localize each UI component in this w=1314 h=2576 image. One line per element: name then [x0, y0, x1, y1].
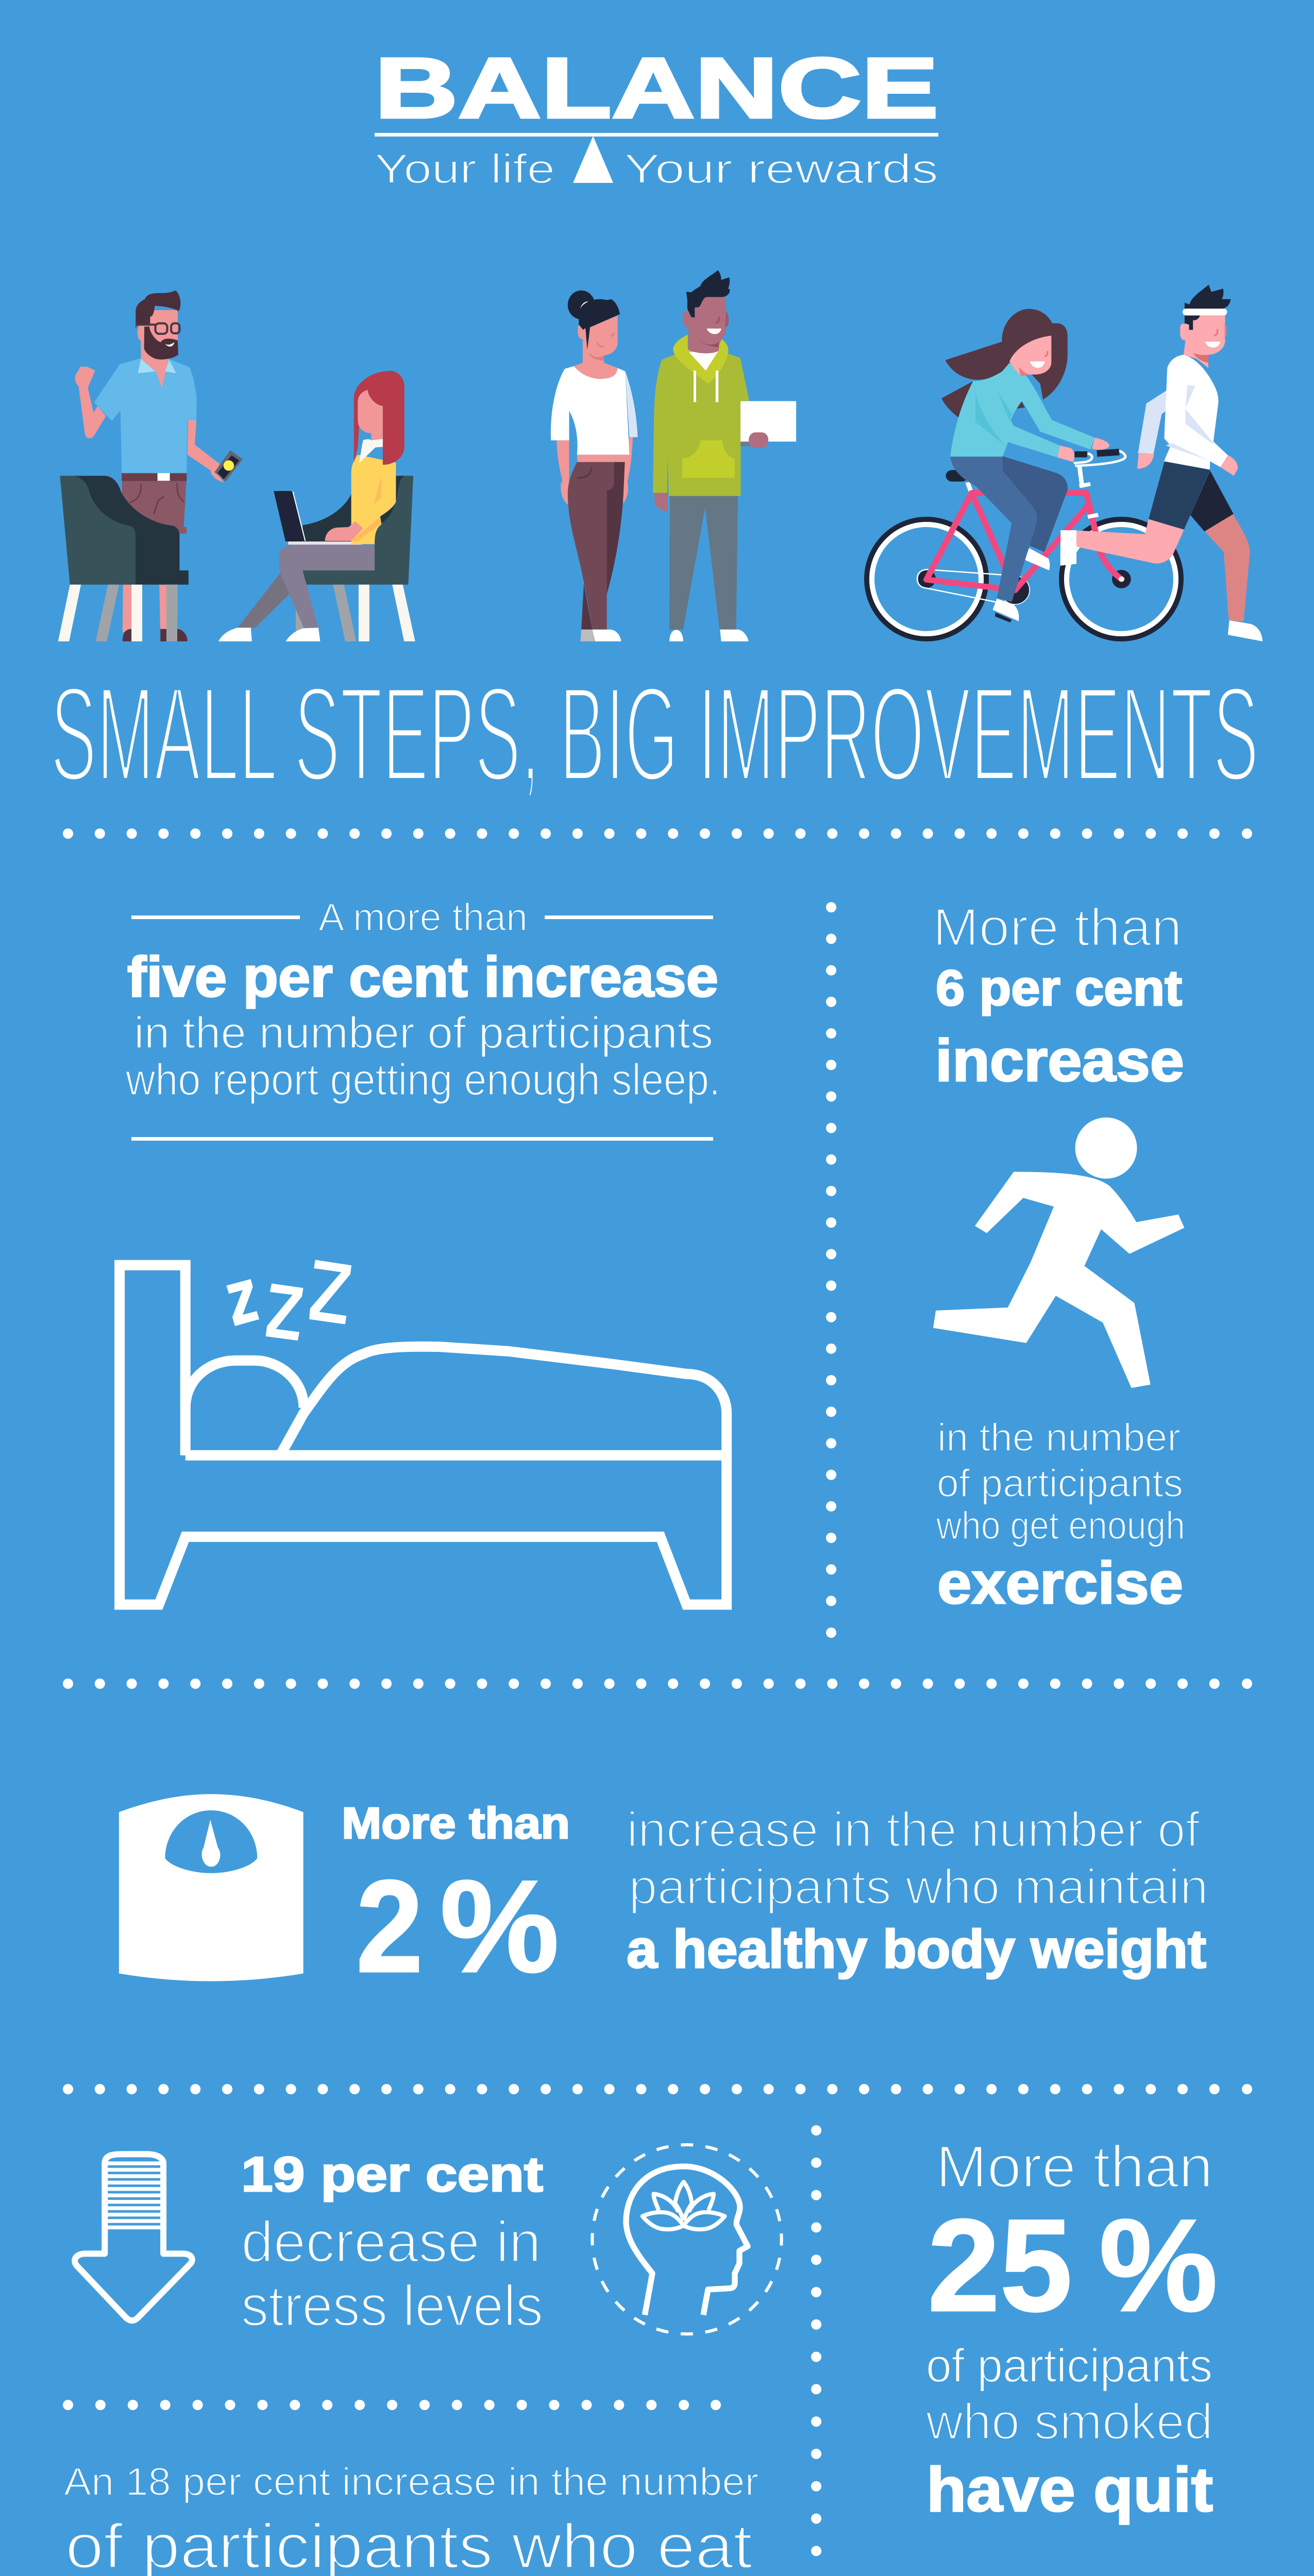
- logo: Balance Your life Your rewards: BALANCE: [375, 41, 938, 136]
- text block: sleep statistic: [125, 895, 720, 1141]
- title: small steps, big improvements: SMALL STEPS, BIG IMPROVEMENTS: [50, 658, 1259, 809]
- text block: healthy body weight: participants who maintain: [629, 1859, 1208, 1914]
- text block: more than 6 per cent increase: increase: [935, 1028, 1184, 1094]
- text block: more than 6 per cent increase: 6 per cent: [936, 960, 1182, 1016]
- icon: head with lotus in dashed circle: [592, 2145, 782, 2334]
- text block: 19 per cent decrease in stress levels: [241, 2147, 543, 2338]
- text block: exercise statistic: in the number: [937, 1416, 1181, 1460]
- text block: exercise statistic: exercise: [937, 1550, 1183, 1616]
- illustration: man standing and woman with laptop in chairs: [58, 291, 415, 641]
- text block: 25 per cent of smokers have quit: of participants: [926, 2340, 1212, 2392]
- illustration: bicycle wheels: [867, 519, 1181, 639]
- text block: healthy body weight: a healthy body weight: [627, 1919, 1206, 1979]
- icon: bed with sleeping person: [120, 1260, 727, 1604]
- text block: exercise statistic: of participants: [937, 1462, 1183, 1505]
- icon: bathroom scale: [119, 1794, 304, 1981]
- icon: downward arrow: [75, 2154, 192, 2320]
- text block: sleep statistic: A more than: [318, 895, 528, 939]
- text block: more than 6 per cent increase: [933, 897, 1184, 1094]
- text block: 25 per cent of smokers have quit: have quit: [926, 2454, 1213, 2524]
- illustration: woman and man in hoodie standing: [551, 270, 796, 641]
- logo: Balance Your life Your rewards: [375, 41, 938, 192]
- text block: 25 per cent of smokers have quit: 25: [928, 2192, 1072, 2339]
- text block: more than 2%: %: [440, 1853, 559, 2000]
- illustration: woman cycling and man running: [917, 285, 1262, 641]
- text block: exercise statistic: who get enough: [936, 1504, 1185, 1548]
- text block: more than 2%: More than: [342, 1799, 570, 1848]
- text block: exercise statistic: [936, 1416, 1185, 1616]
- text block: 25 per cent of smokers have quit: %: [1099, 2192, 1218, 2339]
- text block: 25 per cent of smokers have quit: More than: [936, 2134, 1213, 2200]
- text block: more than 2%: [342, 1799, 570, 2000]
- text block: 19 per cent decrease in stress levels: 19 per cent: [241, 2147, 543, 2202]
- text block: sleep statistic: who report getting enough sleep.: [125, 1055, 720, 1105]
- text block: more than 2%: 2: [356, 1853, 423, 2000]
- text block: sleep statistic: five per cent increase: [127, 945, 718, 1009]
- text block: more than 6 per cent increase: More than: [933, 897, 1182, 957]
- icon: running person: [933, 1117, 1184, 1388]
- text block: sleep statistic: in the number of participants: [134, 1008, 713, 1058]
- logo: Balance Your life Your rewards: Your life: [375, 146, 555, 192]
- text block: 25 per cent of smokers have quit: [925, 2134, 1218, 2524]
- logo: Balance Your life Your rewards: Your rewards: [624, 146, 938, 192]
- text block: healthy body weight: increase in the number of: [627, 1802, 1200, 1857]
- text block: 19 per cent decrease in stress levels: stress levels: [241, 2274, 543, 2338]
- text block: 25 per cent of smokers have quit: who smoked: [925, 2393, 1213, 2450]
- text block: healthy body weight: [627, 1802, 1208, 1979]
- text block: 19 per cent decrease in stress levels: decrease in: [241, 2210, 541, 2274]
- text block: fruits and vegetables statistic: An 18 per cent increase in the number: [64, 2460, 759, 2504]
- text block: fruits and vegetables statistic: [64, 2460, 759, 2576]
